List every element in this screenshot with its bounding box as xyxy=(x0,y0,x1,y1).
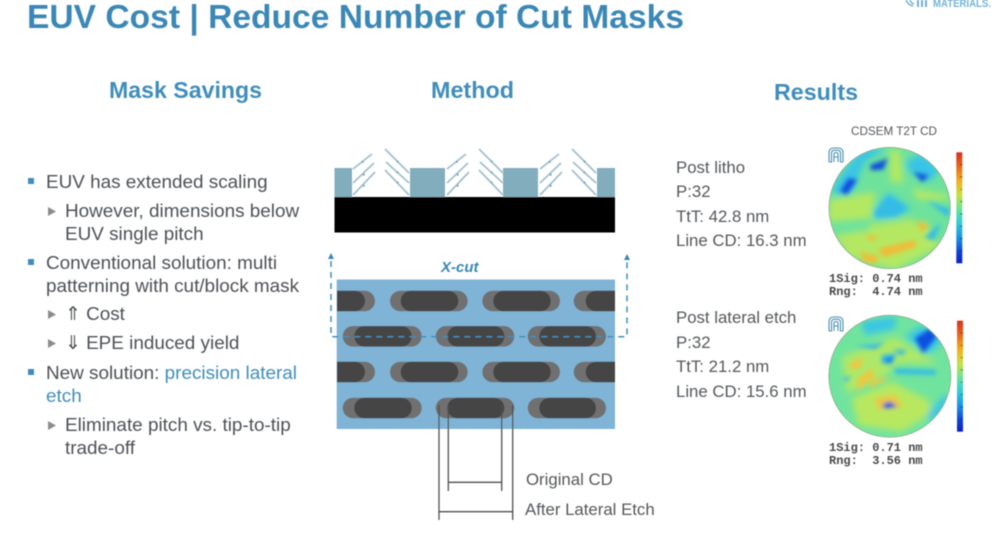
bullet: new solution: etch xyxy=(46,386,82,407)
results text: post lateral etch: Line CD: 15.6 nm xyxy=(676,382,807,401)
label: After Lateral Etch: After Lateral Etch xyxy=(525,500,655,519)
sub-bullet: EPE yield: ⇓ EPE induced yield xyxy=(65,333,239,354)
sub-bullet: dimensions below single pitch xyxy=(48,201,300,245)
stats: wafer 1: Rng: 4.74 nm xyxy=(829,285,923,299)
bullet: conventional solution: patterning with cut/block mask xyxy=(46,276,300,297)
chart title: CDSEM T2T CD: CDSEM T2T CD xyxy=(851,124,937,138)
sub-bullet: eliminate trade-off: Eliminate pitch vs. tip-to-tip xyxy=(65,415,291,436)
stats: wafer 2: 1Sig: 0.71 nm xyxy=(829,441,923,455)
bullet: conventional solution xyxy=(28,253,300,297)
sub-bullet: dimensions below single pitch: EUV single pitch xyxy=(65,224,204,245)
heading: Mask Savings: Mask Savings xyxy=(109,77,262,103)
results text: post litho: P:32 xyxy=(676,182,711,201)
outer after-etch trenches xyxy=(337,291,615,418)
results text: post litho: Post litho xyxy=(676,158,745,177)
EUV rays xyxy=(353,149,596,195)
bullet: conventional solution: Conventional solution: multi xyxy=(46,253,277,274)
results text: post litho: TtT: 42.8 nm xyxy=(676,207,769,226)
sub-bullet: eliminate trade-off xyxy=(48,415,291,459)
label: Original CD: Original CD xyxy=(526,470,613,489)
heading: Results: Results xyxy=(774,79,858,105)
chart: wafer map post lateral etch xyxy=(825,312,955,442)
colour scale bar 2 xyxy=(957,321,963,432)
bullet: new solution xyxy=(28,363,297,407)
sub-bullet: cost: ⇑ Cost xyxy=(65,304,126,325)
icon: logo on wafer 2 xyxy=(829,317,843,331)
black substrate xyxy=(334,197,615,232)
resist blocks xyxy=(334,168,615,197)
results text: post lateral etch: Post lateral etch xyxy=(676,308,796,327)
diagram: EUV exposure cross-section xyxy=(334,149,615,232)
logo: Applied Materials cropped xyxy=(906,0,991,10)
dimension lines: CD measurement xyxy=(439,405,513,520)
icon: logo on wafer 1 xyxy=(829,148,843,162)
results text: post litho: Line CD: 16.3 nm xyxy=(676,231,807,250)
results text: post litho xyxy=(676,158,807,250)
diagram: top-down line pattern with lateral etch xyxy=(337,280,615,429)
results text: post lateral etch xyxy=(676,308,807,401)
bullet: EUV scaling: EUV has extended scaling xyxy=(46,172,268,193)
heading: Method: Method xyxy=(431,77,514,103)
sub-bullet: dimensions below single pitch: However, dimensions below xyxy=(65,201,300,222)
stats: wafer 2 xyxy=(829,441,923,468)
colour scale bar 1 xyxy=(956,152,962,263)
stats: wafer 1: 1Sig: 0.74 nm xyxy=(829,272,923,286)
bullet: new solution: New solution: precision lateral xyxy=(46,363,297,384)
label: X-cut: X-cut xyxy=(440,259,480,276)
inner original trenches xyxy=(337,291,615,418)
stats: wafer 1 xyxy=(829,272,923,299)
results text: post lateral etch: P:32 xyxy=(676,333,711,352)
sub-bullet: eliminate trade-off: trade-off xyxy=(65,438,136,459)
blue background panel xyxy=(337,280,615,429)
arrow: X-cut dashed section line xyxy=(328,253,630,337)
panel: mask savings bullet list xyxy=(28,172,300,459)
chart: wafer map post litho xyxy=(825,143,955,273)
results text: post lateral etch: TtT: 21.2 nm xyxy=(676,357,769,376)
stats: wafer 2: Rng: 3.56 nm xyxy=(829,454,923,468)
